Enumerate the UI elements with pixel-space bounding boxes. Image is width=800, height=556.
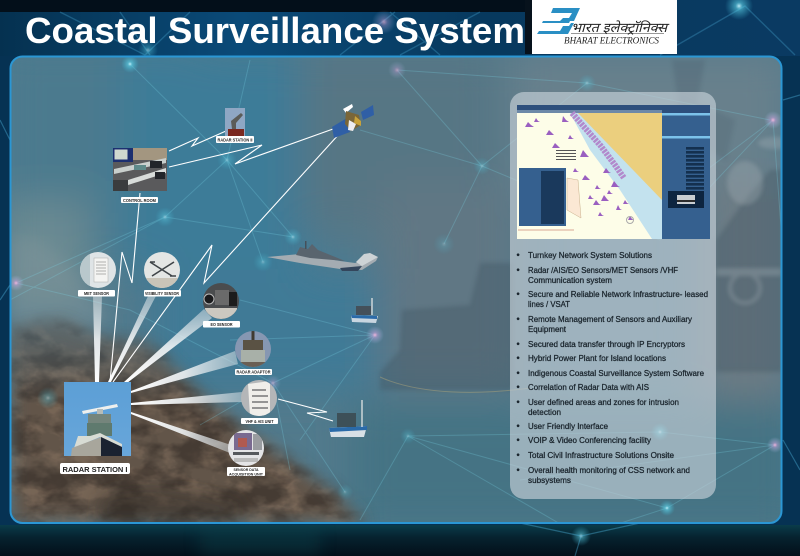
background warship [380, 60, 782, 390]
feature list: Total Civil Infrastructure Solutions Onsite [528, 450, 674, 460]
feature list [516, 250, 708, 485]
feature list: Radar /AIS/EO Sensors/MET Sensors /VHF [528, 265, 678, 275]
feature list: Remote Management of Sensors and Auxiliary [528, 314, 693, 324]
radar station II [216, 108, 254, 143]
visibility sensor [144, 252, 181, 296]
VHF and AIS unit [241, 380, 278, 424]
ship: naval vessel [267, 241, 378, 271]
logo: Bharat Electronics: भारत इलेक्ट्रॉनिक्स [571, 20, 669, 35]
logo: Bharat Electronics: BHARAT ELECTRONICS [564, 36, 659, 46]
feature list: Hybrid Power Plant for Island locations [528, 353, 666, 363]
MET sensor [78, 252, 116, 296]
feature list: • [516, 250, 520, 260]
radar station I [60, 382, 131, 474]
feature list: • [516, 465, 520, 475]
logo: Bharat Electronics [525, 0, 677, 54]
control room [113, 148, 167, 203]
feature list: VOIP & Video Conferencing facility [528, 435, 652, 445]
EO sensor: EO SENSOR [210, 322, 233, 327]
feature list: • [516, 397, 520, 407]
beams from radar station I to sensors [93, 294, 242, 453]
feature list: • [516, 265, 520, 275]
feature list: Secured data transfer through IP Encryptors [528, 339, 685, 349]
sensor data acquisition unit: SENSOR DATA [234, 467, 259, 472]
feature list: detection [528, 407, 561, 417]
map screenshot [517, 105, 710, 239]
feature list: Turnkey Network System Solutions [528, 250, 652, 260]
radar adaptor: RADAR ADAPTOR [236, 370, 271, 375]
feature list: Overall health monitoring of CSS network and [528, 465, 690, 475]
feature list: • [516, 435, 520, 445]
radar station I: RADAR STATION I [62, 465, 128, 474]
feature list: • [516, 421, 520, 431]
feature list: • [516, 368, 520, 378]
control room: CONTROL ROOM [123, 198, 156, 203]
MET sensor: MET SENSOR [84, 291, 110, 296]
radar adaptor [235, 331, 272, 375]
feature list: User Friendly Interface [528, 421, 608, 431]
sensor data acquisition unit: ACQUISITION UNIT [229, 471, 264, 476]
feature list: • [516, 353, 520, 363]
VHF and AIS unit: VHF & AIS UNIT [246, 419, 274, 424]
feature list: • [516, 339, 520, 349]
title: Coastal Surveillance System [25, 10, 525, 51]
feature list: lines / VSAT [528, 299, 570, 309]
feature list: • [516, 382, 520, 392]
feature list: Equipment [528, 324, 567, 334]
feature list: subsystems [528, 475, 571, 485]
feature list: Communication system [528, 275, 612, 285]
feature list: • [516, 314, 520, 324]
ship: fishing boat with link [329, 400, 367, 437]
visibility sensor: VISIBILITY SENSOR [145, 291, 180, 296]
rock [11, 237, 381, 523]
radar station II: RADAR STATION II [218, 138, 252, 142]
feature panel [510, 92, 716, 499]
sensor data acquisition unit [227, 430, 265, 476]
communication links [110, 129, 340, 421]
feature list: Secure and Reliable Network Infrastructure- leased [528, 289, 708, 299]
feature list: Indigenous Coastal Surveillance System Software [528, 368, 704, 378]
EO sensor [203, 283, 240, 328]
feature list: • [516, 450, 520, 460]
feature list: Correlation of Radar Data with AIS [528, 382, 649, 392]
feature list: User defined areas and zones for intrusion [528, 397, 679, 407]
feature list: • [516, 289, 520, 299]
ship: fishing boat [351, 298, 378, 323]
satellite [332, 104, 374, 138]
